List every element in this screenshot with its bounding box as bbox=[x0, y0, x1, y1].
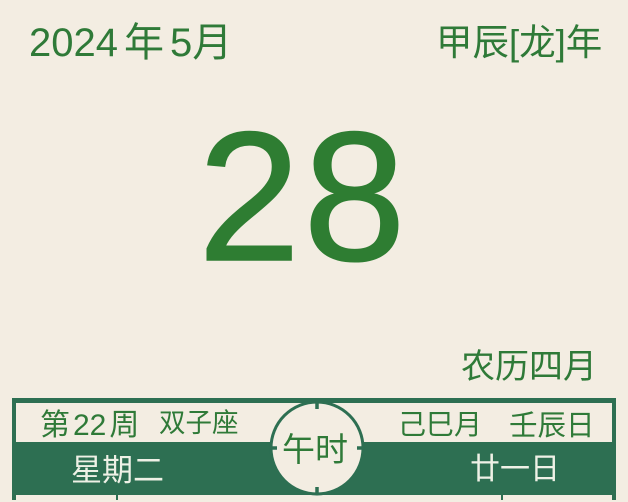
panel frame right bbox=[612, 398, 616, 500]
bottom row divider left bbox=[116, 495, 118, 500]
lunar month stem-branch: 己巳月 bbox=[398, 409, 482, 440]
date heading: year and month: 2024年5月 bbox=[29, 21, 232, 65]
lunar day: 廿一日 bbox=[470, 453, 560, 486]
large day number: 28 bbox=[198, 93, 409, 299]
zodiac sign: 双子座 bbox=[159, 408, 238, 438]
almanac panel bbox=[12, 398, 616, 500]
time period label: 午时 bbox=[282, 431, 348, 468]
panel frame top bbox=[12, 398, 616, 403]
clock circle: time of day bbox=[270, 403, 364, 496]
zodiac year label: 甲辰[龙]年 bbox=[436, 22, 602, 63]
weekday: 星期二 bbox=[71, 453, 164, 488]
lunar month label: 农历四月 bbox=[461, 348, 597, 386]
week number: 第22周 bbox=[40, 409, 139, 442]
bottom row divider right bbox=[501, 495, 503, 500]
green band bbox=[12, 442, 616, 495]
lunar day stem-branch: 壬辰日 bbox=[509, 410, 595, 442]
panel frame left bbox=[12, 398, 16, 500]
